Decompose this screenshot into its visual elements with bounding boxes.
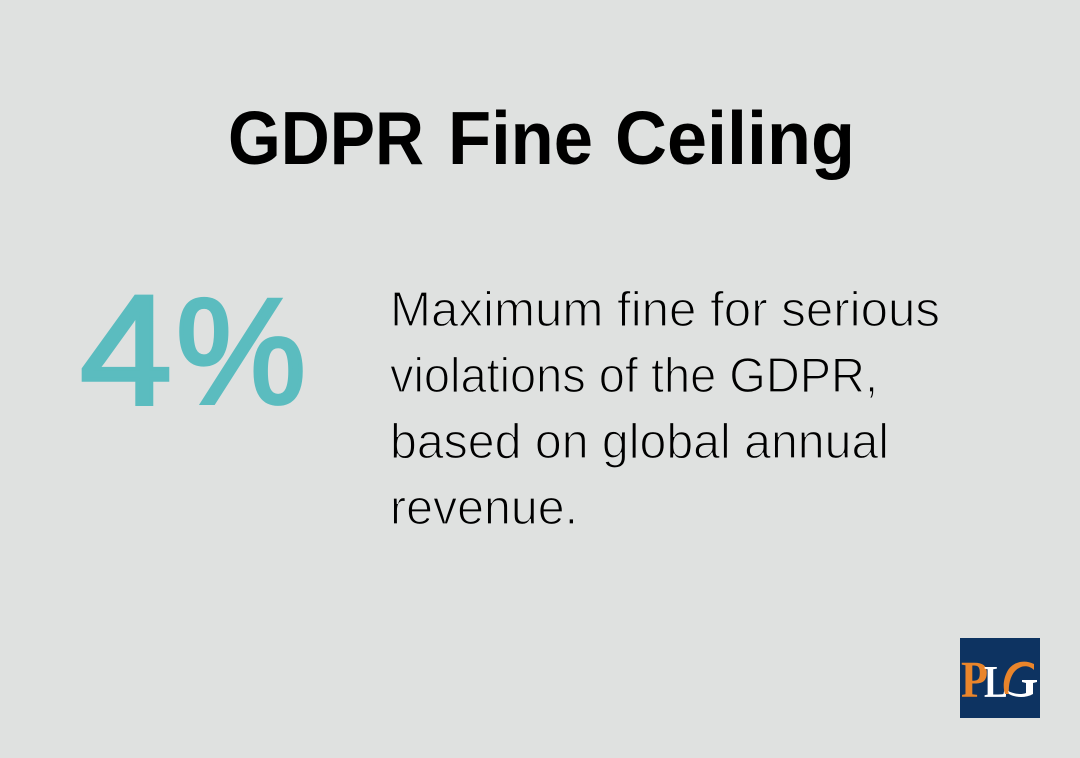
statistic: 4%: 4 [80, 264, 172, 438]
description text: based on global annual [390, 415, 889, 469]
logo: PLG [960, 638, 1040, 718]
description text: revenue. [390, 481, 578, 535]
statistic: 4% [80, 264, 306, 438]
title: Fine [448, 96, 593, 180]
description text [390, 283, 940, 535]
logo: PLG: L [984, 656, 1008, 707]
description text: violations of the GDPR, [390, 349, 878, 403]
title: GDPR [228, 96, 424, 180]
title: Ceiling [615, 96, 855, 180]
description text: Maximum fine for serious [390, 283, 940, 337]
title [228, 96, 855, 180]
logo: PLG: P [961, 652, 988, 709]
statistic: 4%: % [176, 267, 306, 435]
